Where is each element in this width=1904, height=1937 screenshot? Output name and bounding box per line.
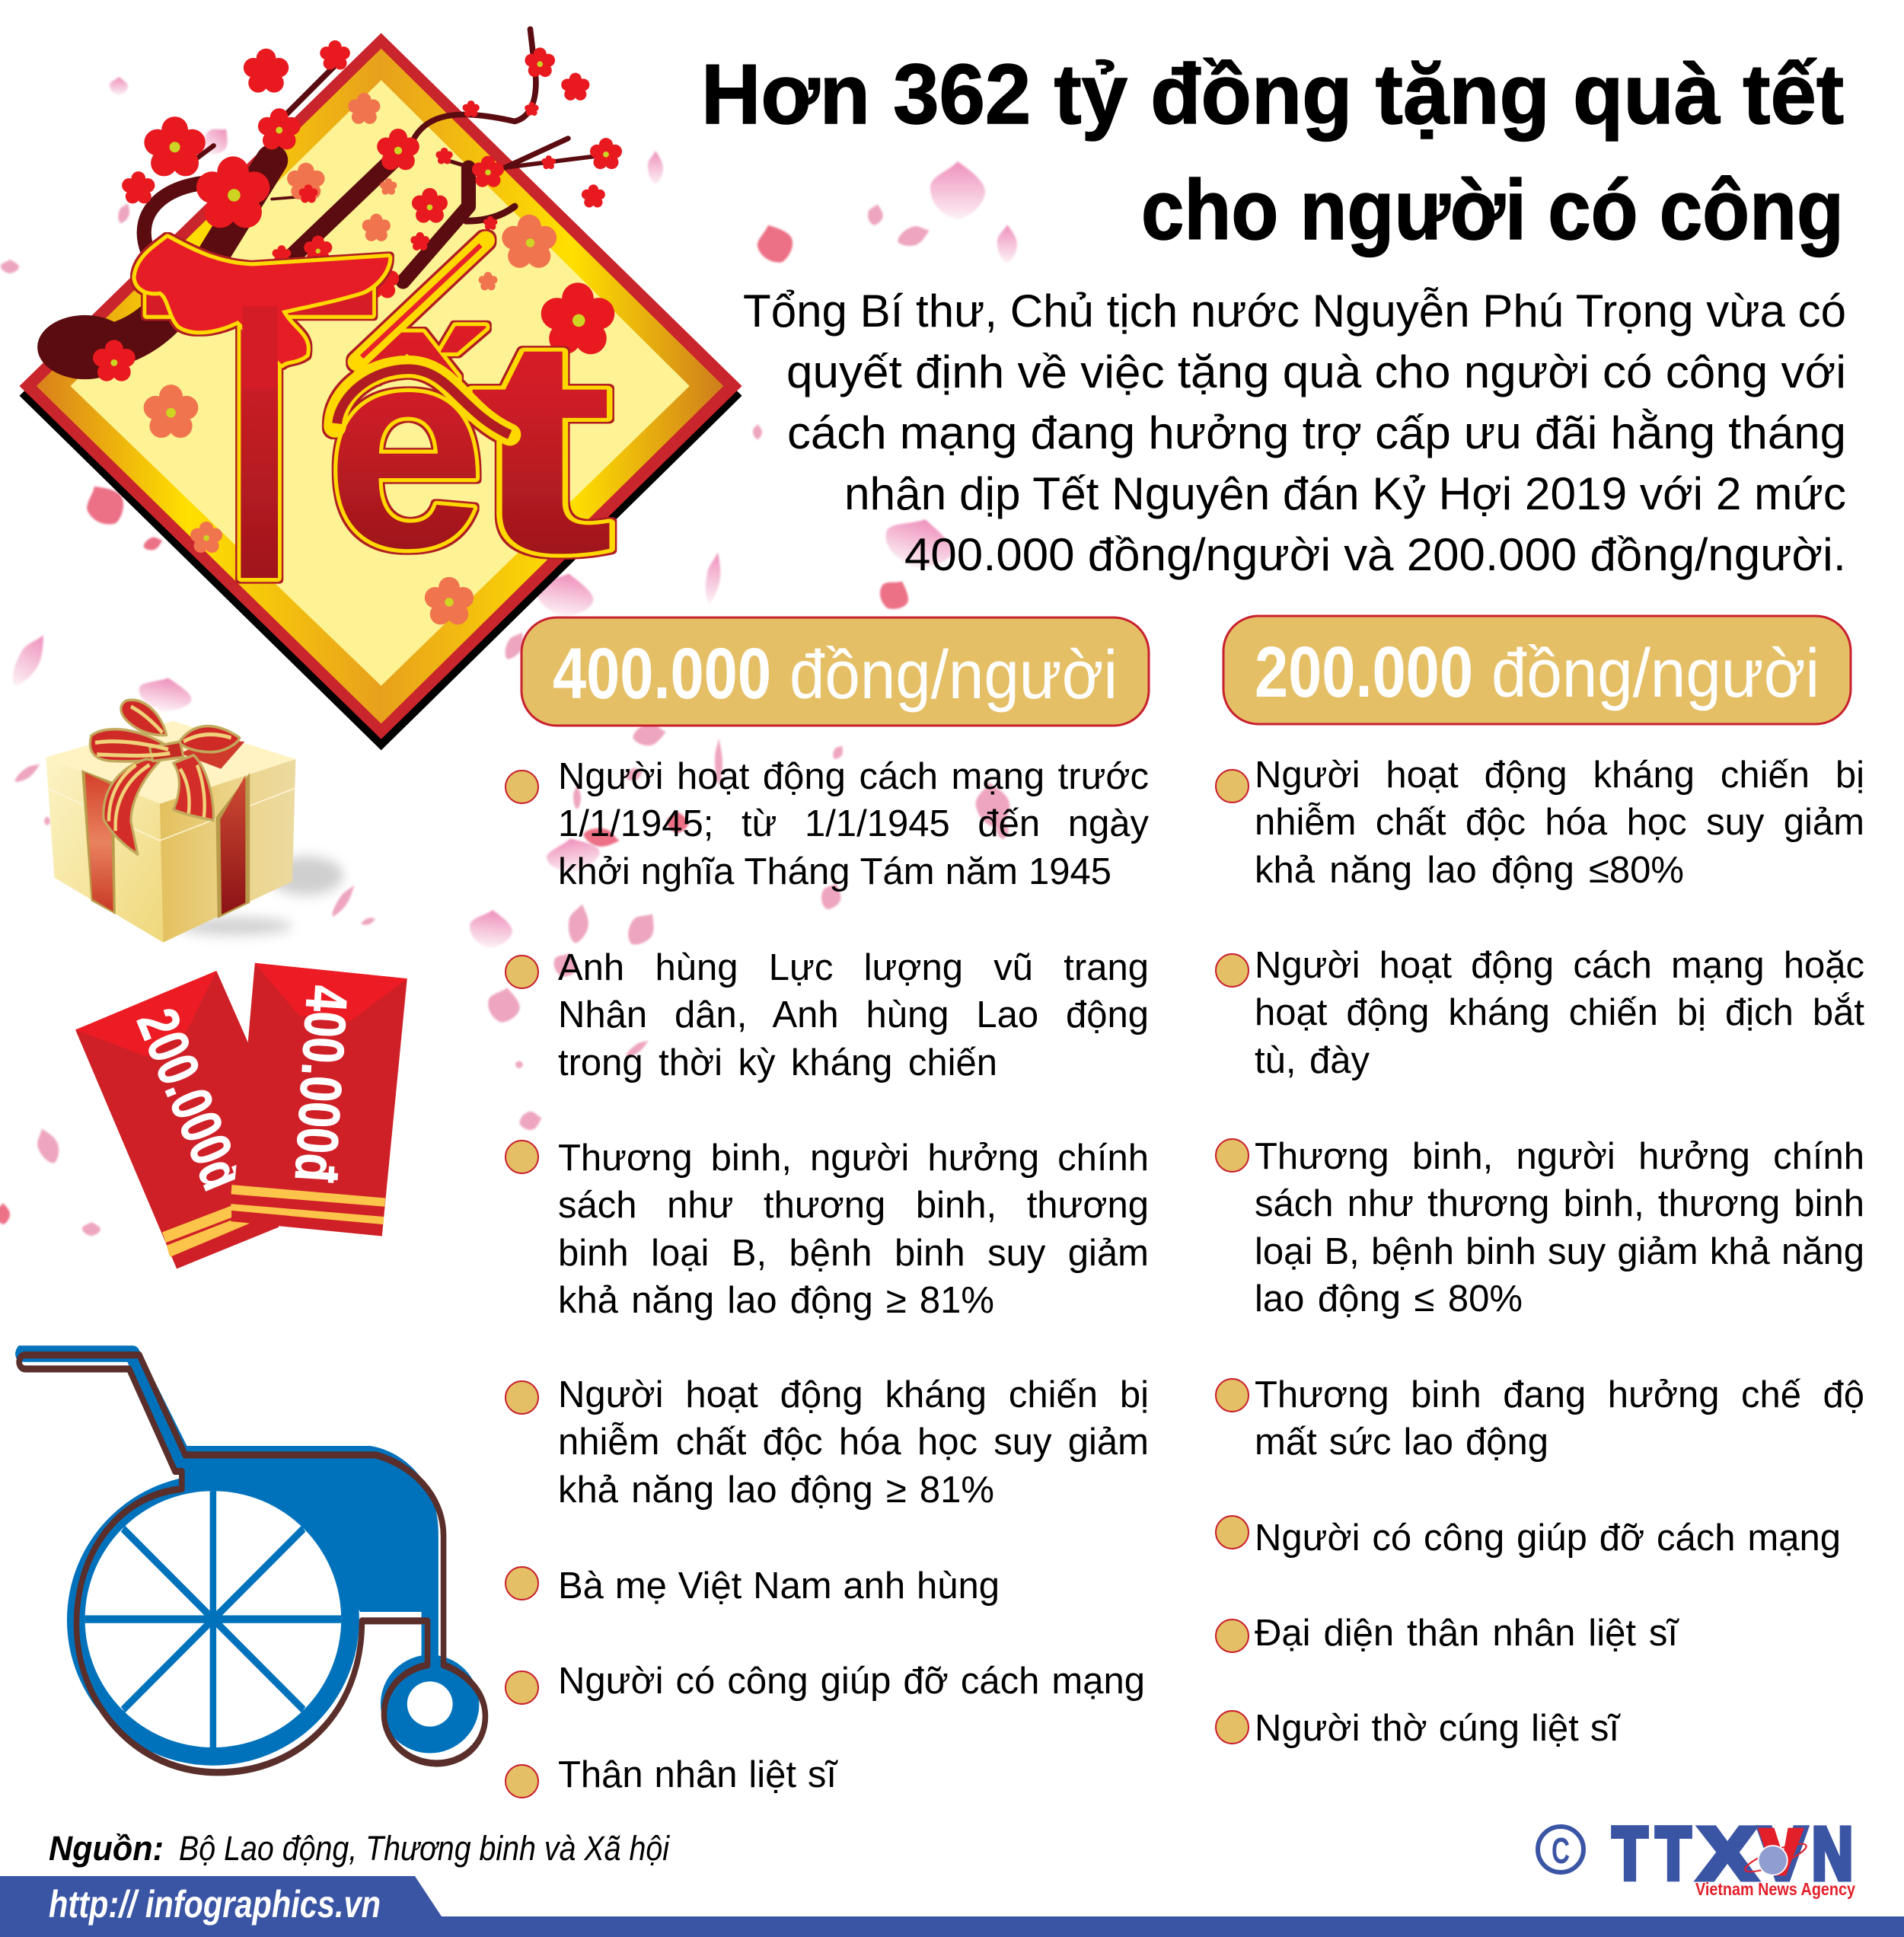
- envelope 200.000đ: 200.000đ: [124, 1000, 255, 1199]
- list item: 400k 4: Người hoạt động kháng chiến bị: [558, 1374, 1149, 1415]
- gift shadow: [177, 856, 343, 935]
- intro text: Tổng Bí thư, Chủ tịch nước Nguyễn Phú Trọng vừa có: [743, 286, 1846, 337]
- list item: 200k 3: loại B, bệnh binh suy giảm khả năng: [1255, 1231, 1864, 1272]
- list item: 400k 2: Nhân dân, Anh hùng Lao động: [558, 994, 1149, 1036]
- list item: 400k 6: Người có công giúp đỡ cách mạng: [558, 1661, 1145, 1702]
- rear wheel: [67, 1475, 359, 1766]
- list item: 400k 4: nhiễm chất độc hóa học suy giảm: [558, 1422, 1149, 1463]
- envelope 400.000đ: [231, 963, 407, 1236]
- calligraphic word Tết: [136, 189, 615, 669]
- copyright mark: C: [1552, 1831, 1570, 1872]
- heading pill: 400.000 đồng/người: đồng/người: [789, 637, 1118, 713]
- list item: 400k 1: khởi nghĩa Tháng Tám năm 1945: [558, 851, 1111, 892]
- list item: 200k 3: Thương binh, người hưởng chính: [1255, 1136, 1864, 1177]
- plum branches: [85, 29, 602, 347]
- list item: 200k 1: Người hoạt động kháng chiến bị: [1255, 755, 1864, 796]
- list item: 200k 4: mất sức lao động: [1255, 1422, 1548, 1463]
- logo: TTXVN: [1612, 1812, 1855, 1899]
- source line: Bộ Lao động, Thương binh và Xã hội: [179, 1829, 671, 1868]
- title: Hơn 362 tỷ đồng tặng quà tết: [701, 47, 1844, 142]
- list item: 400k 3: sách như thương binh, thương: [558, 1185, 1149, 1226]
- list item: 200k 2: Người hoạt động cách mạng hoặc: [1255, 945, 1864, 986]
- list item: 400k 7: Thân nhân liệt sĩ: [558, 1754, 837, 1795]
- footer bar: [0, 1876, 1904, 1937]
- source line: Nguồn:: [49, 1829, 164, 1868]
- heading pill: 400.000 đồng/người: 400.000: [553, 633, 771, 714]
- icon: wheelchair: [15, 1345, 485, 1773]
- icon: gift box: [46, 700, 343, 943]
- list item: 200k 1: [1215, 755, 1864, 891]
- brown outline: [19, 1355, 485, 1773]
- envelope 200.000đ: [75, 971, 279, 1268]
- front wheel: [381, 1655, 479, 1754]
- calligraphic word Tết: T: [137, 189, 381, 669]
- list item: 400k 4: khả năng lao động ≥ 81%: [558, 1470, 994, 1511]
- chair body: [15, 1345, 439, 1663]
- footer url: http:// infographics.vn: [49, 1883, 381, 1926]
- copyright mark: [1538, 1827, 1583, 1872]
- logo: TTXVN: N: [1812, 1812, 1853, 1895]
- calligraphic word Tết: t: [467, 275, 615, 617]
- icon: Tết diamond with plum blossom branch: [20, 29, 742, 750]
- icon: red envelopes: [75, 963, 407, 1268]
- box faces: [46, 721, 295, 943]
- heading pill: 200.000 đồng/người: đồng/người: [1491, 636, 1819, 712]
- list item: 400k 3: Thương binh, người hưởng chính: [558, 1138, 1149, 1179]
- branch base: [37, 315, 132, 379]
- heading pill: 400.000 đồng/người: [521, 617, 1149, 726]
- envelope 400.000đ: 400.000đ: [282, 984, 359, 1184]
- flowers: [122, 40, 622, 624]
- logo: TTXVN: Vietnam News Agency: [1695, 1879, 1855, 1899]
- list item: 400k 2: Anh hùng Lực lượng vũ trang: [558, 947, 1149, 988]
- list item: 200k 4: Thương binh đang hưởng chế độ: [1255, 1374, 1864, 1415]
- intro text: nhân dịp Tết Nguyên đán Kỷ Hợi 2019 với 2 mức: [844, 468, 1846, 519]
- heading pill: 200.000 đồng/người: 200.000: [1255, 632, 1473, 713]
- list item: 200k 2: [1215, 945, 1864, 1081]
- list item: 400k 3: [505, 1138, 1149, 1321]
- list item: 200k 4: [1215, 1374, 1864, 1463]
- background: falling petals: [0, 77, 1017, 1236]
- list item: 200k 3: [1215, 1136, 1864, 1320]
- heading pill: 200.000 đồng/người: [1223, 616, 1851, 724]
- list item: 200k 1: nhiễm chất độc hóa học suy giảm: [1255, 802, 1864, 843]
- list item: 200k 1: khả năng lao động ≤80%: [1255, 850, 1684, 891]
- list item: 200k 2: tù, đày: [1255, 1040, 1370, 1081]
- logo: TTXVN: X: [1698, 1812, 1756, 1895]
- list item: 200k 6: Đại diện thân nhân liệt sĩ: [1255, 1613, 1678, 1654]
- list item: 400k 5: Bà mẹ Việt Nam anh hùng: [558, 1565, 1000, 1607]
- logo: TTXVN: T: [1612, 1812, 1647, 1895]
- list item: 200k 7: Người thờ cúng liệt sĩ: [1255, 1708, 1619, 1749]
- list item: 400k 1: 1/1/1945; từ 1/1/1945 đến ngày: [558, 803, 1149, 844]
- list item: 400k 2: [505, 947, 1149, 1083]
- list item: 400k 1: [505, 756, 1149, 892]
- list item: 400k 2: trong thời kỳ kháng chiến: [558, 1042, 997, 1083]
- calligraphic word Tết: ế: [327, 287, 487, 608]
- list item: 200k 2: hoạt động kháng chiến bị địch bắt: [1255, 992, 1864, 1033]
- list item: 400k 1: Người hoạt động cách mạng trước: [558, 756, 1149, 797]
- flower on branch base: [93, 340, 136, 381]
- ribbon bands: [81, 739, 250, 918]
- intro text: 400.000 đồng/người và 200.000 đồng/người.: [904, 529, 1846, 580]
- bow: [90, 700, 240, 854]
- list item: 400k 3: khả năng lao động ≥ 81%: [558, 1280, 994, 1321]
- list item: 400k 3: binh loại B, bệnh binh suy giảm: [558, 1233, 1149, 1274]
- list item: 200k 3: lao động ≤ 80%: [1255, 1278, 1523, 1320]
- list item: 400k 4: [505, 1374, 1149, 1511]
- intro text: quyết định về việc tặng quà cho người có công với: [786, 346, 1846, 397]
- title: cho người có công: [1141, 163, 1844, 257]
- title: [701, 47, 1844, 257]
- intro text: cách mạng đang hưởng trợ cấp ưu đãi hằng tháng: [787, 407, 1846, 458]
- diamond frame: [20, 33, 742, 750]
- logo: TTXVN: V: [1759, 1812, 1807, 1895]
- list item: 200k 5: Người có công giúp đỡ cách mạng: [1255, 1517, 1841, 1559]
- list item: 200k 3: sách như thương binh, thương binh: [1255, 1183, 1864, 1224]
- logo: TTXVN: T: [1656, 1812, 1691, 1895]
- intro text: [743, 286, 1846, 580]
